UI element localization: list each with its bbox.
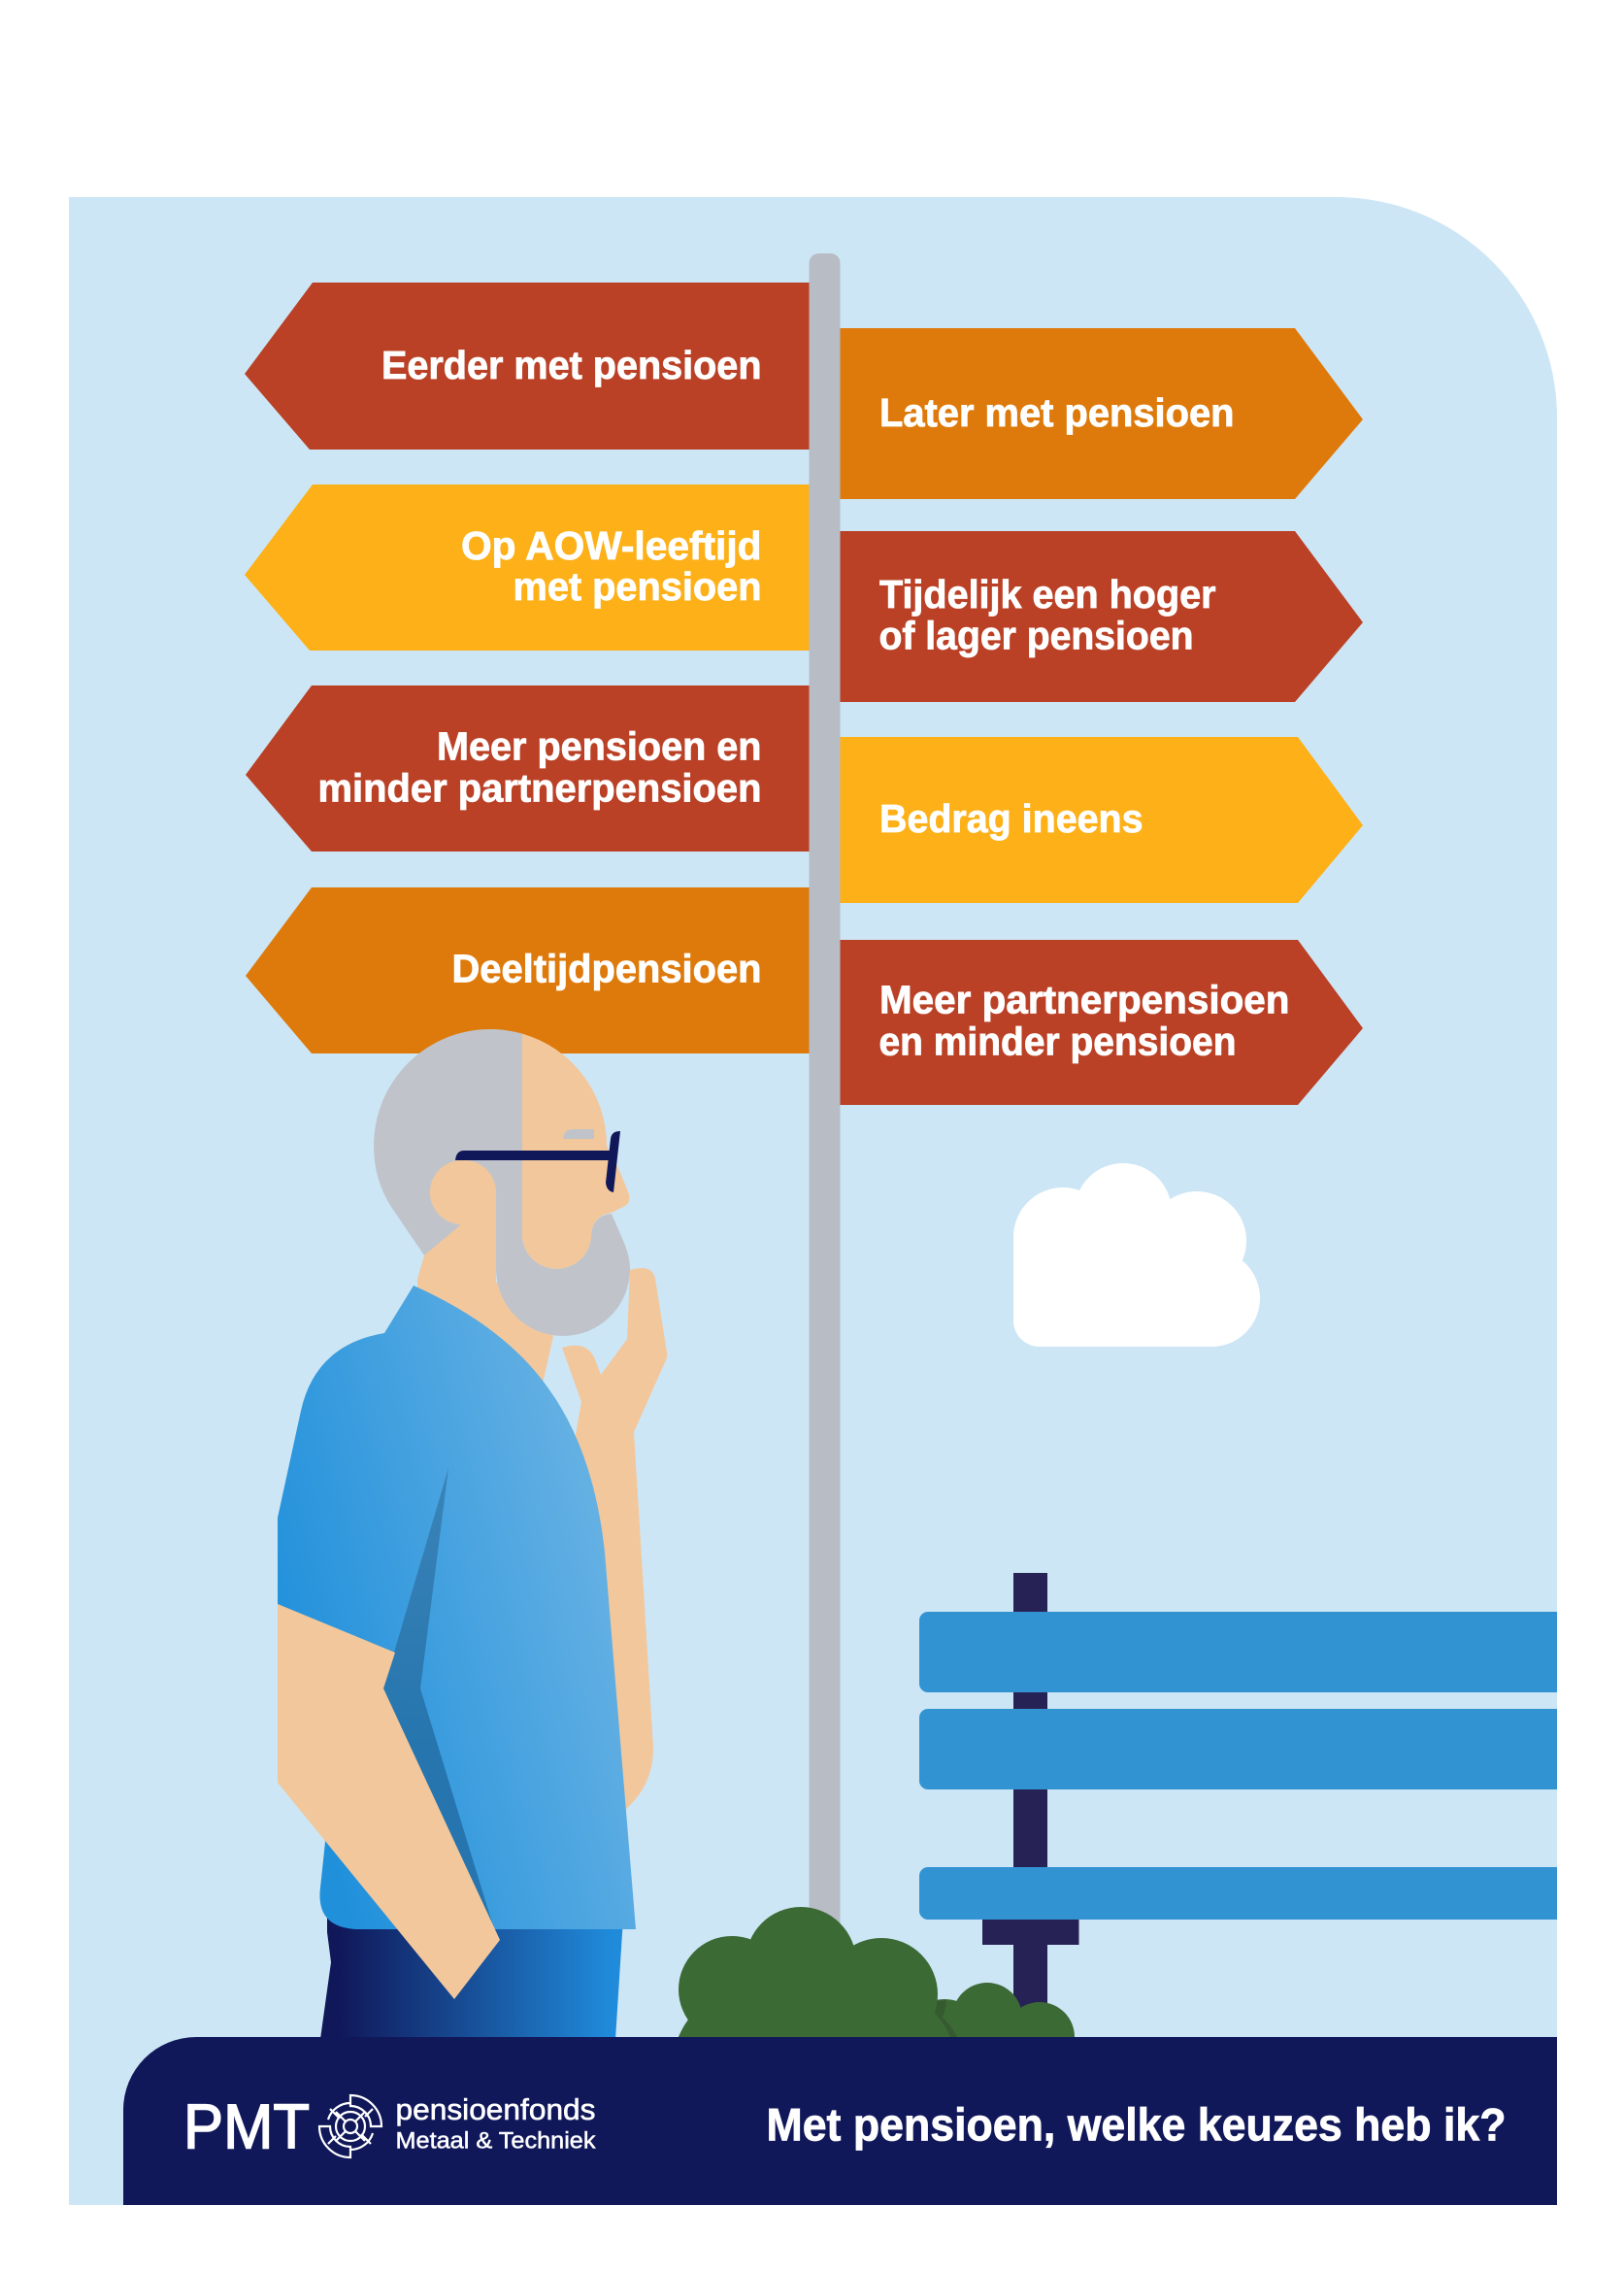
right sign: Meer partnerpensioen en minder pensioen xyxy=(841,940,1363,1105)
left sign: Op AOW-leeftijd met pensioen: met pensioen xyxy=(513,564,761,609)
logo wordmark PMT: PMT xyxy=(183,2091,310,2161)
right sign: Meer partnerpensioen en minder pensioen: en minder pensioen xyxy=(879,1019,1237,1064)
cloud xyxy=(1013,1163,1260,1347)
eyebrow xyxy=(563,1129,594,1139)
neck xyxy=(417,1192,553,1384)
left sign: Meer pensioen en minder partnerpensioen: Meer pensioen en xyxy=(437,724,761,769)
shirt xyxy=(278,1286,636,1929)
man looking at signpost xyxy=(278,1029,667,2039)
shirt fold xyxy=(383,1468,495,1932)
raised forearm and hand xyxy=(562,1268,667,1809)
glasses xyxy=(455,1131,620,1192)
footer title: Met pensioen, welke keuzes heb ik? xyxy=(767,2099,1507,2150)
right sign: Bedrag ineens: Bedrag ineens xyxy=(879,796,1143,841)
left sign: Deeltijdpensioen: Deeltijdpensioen xyxy=(452,946,761,990)
left sign: Eerder met pensioen: Eerder met pensioen xyxy=(381,343,761,387)
right sign: Tijdelijk een hoger of lager pensioen xyxy=(841,531,1363,702)
trousers xyxy=(320,1903,624,2039)
right sign: Tijdelijk een hoger of lager pensioen: of lager pensioen xyxy=(879,614,1194,658)
right sign: Later met pensioen: Later met pensioen xyxy=(879,390,1235,435)
logo text: pensioenfonds: pensioenfonds xyxy=(396,2092,596,2126)
left sign: Op AOW-leeftijd met pensioen xyxy=(245,484,810,651)
signpost pole xyxy=(810,253,841,1952)
left sign: Meer pensioen en minder partnerpensioen xyxy=(246,685,810,852)
logo text: Metaal & Techniek: Metaal & Techniek xyxy=(396,2128,597,2154)
left sign: Eerder met pensioen xyxy=(245,283,810,450)
logo emblem xyxy=(319,2095,381,2157)
ear xyxy=(430,1160,496,1243)
left sign: Meer pensioen en minder partnerpensioen: minder partnerpensioen xyxy=(318,765,761,810)
arm with hand in pocket xyxy=(278,1604,500,1999)
right sign: Tijdelijk een hoger of lager pensioen: Tijdelijk een hoger xyxy=(879,572,1216,617)
right sign: Bedrag ineens xyxy=(841,737,1363,903)
large bush xyxy=(678,1907,950,2051)
footer bar xyxy=(123,2037,1557,2205)
hair and beard xyxy=(374,1029,630,1336)
small bush xyxy=(905,1983,1075,2079)
face xyxy=(522,1034,629,1269)
right sign: Later met pensioen xyxy=(841,328,1363,499)
right sign: Meer partnerpensioen en minder pensioen: Meer partnerpensioen xyxy=(879,977,1289,1021)
bench xyxy=(919,1573,1557,2039)
left sign: Op AOW-leeftijd met pensioen: Op AOW-leeftijd xyxy=(461,523,761,568)
left sign: Deeltijdpensioen xyxy=(246,887,810,1053)
